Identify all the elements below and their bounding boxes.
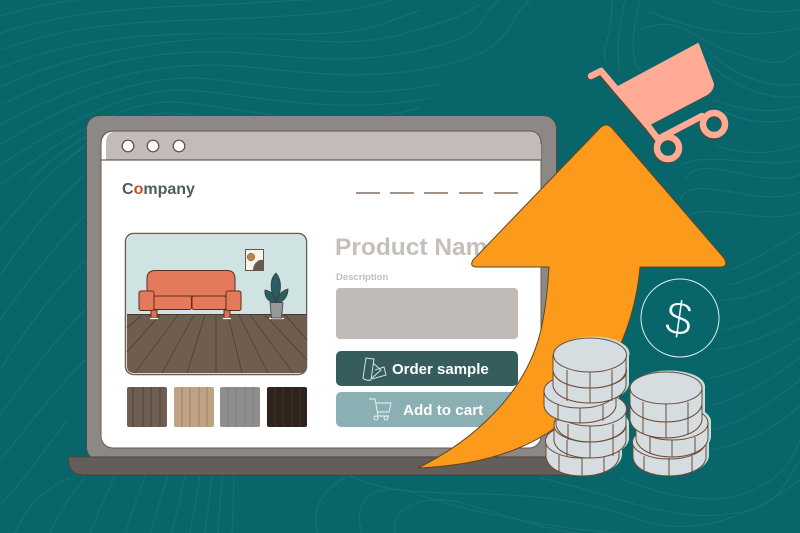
description label: Description	[336, 272, 388, 283]
icon: swatch fan	[363, 358, 386, 380]
coin 1	[546, 424, 619, 476]
icon: cart	[369, 399, 391, 420]
company logo: Company	[122, 181, 195, 198]
dollar circle	[641, 279, 719, 357]
coin 5	[553, 354, 626, 403]
browser window	[101, 131, 541, 448]
dollar sign: $	[662, 291, 696, 347]
product name: Product Name	[335, 234, 501, 261]
button label: Add to cart	[403, 402, 483, 419]
growth arrow	[418, 125, 726, 468]
button label: Order sample	[392, 361, 489, 378]
order sample button	[336, 351, 518, 386]
swatch: dark	[267, 387, 307, 427]
coin 3	[556, 392, 626, 442]
navigation dashes	[356, 192, 518, 194]
material swatches	[127, 387, 307, 427]
browser toolbar	[106, 131, 541, 160]
halo	[547, 336, 630, 474]
potted plant	[265, 273, 288, 318]
leg highlights	[150, 318, 284, 320]
window control dots	[122, 140, 185, 152]
add to cart button	[336, 392, 518, 427]
coin 3	[630, 388, 702, 438]
swatch: oak	[174, 387, 214, 427]
halo	[633, 370, 711, 474]
room image	[126, 234, 307, 374]
laptop lid	[86, 116, 556, 460]
coin stack right	[630, 370, 711, 476]
cart body	[591, 44, 725, 159]
description box	[336, 288, 518, 339]
coin 4	[544, 374, 616, 423]
coin 2	[554, 408, 626, 458]
laptop base	[68, 457, 600, 475]
swatch: grey	[220, 387, 260, 427]
coin 6	[553, 338, 626, 388]
coin 4	[630, 372, 702, 422]
laptop	[68, 116, 600, 475]
shopping cart	[590, 44, 725, 160]
swatch: walnut	[127, 387, 167, 427]
coin 2	[636, 406, 708, 457]
coin 1	[632, 425, 706, 476]
cart shadow	[590, 45, 724, 160]
coin stack left	[544, 336, 630, 476]
wall art	[246, 250, 264, 270]
floor	[127, 315, 307, 373]
sofa	[139, 270, 241, 318]
